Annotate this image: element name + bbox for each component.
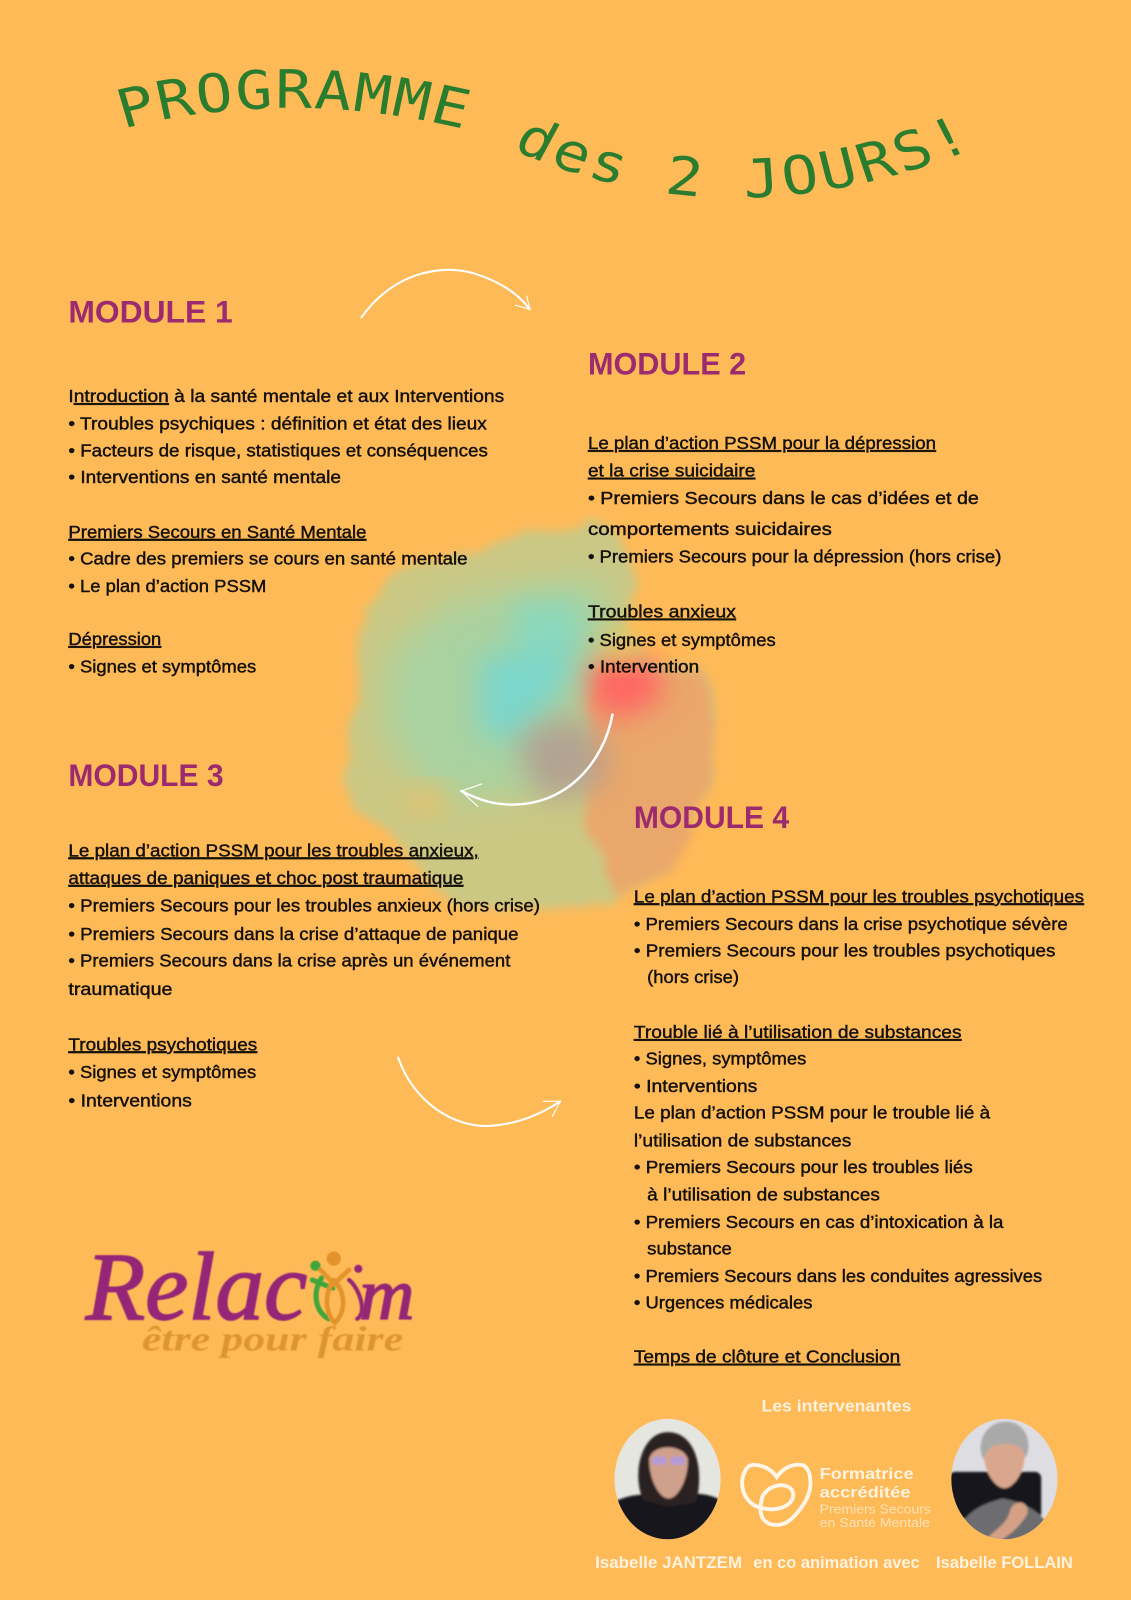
text block: substances: à l’utilisation de substances (647, 1184, 880, 1204)
text block: introduction: Introduction à la santé mentale et aux Interventions (68, 386, 505, 406)
arrow: module 2 to module 3 (461, 715, 612, 806)
text block: plan d'action troubles anxieux: attaques de paniques et choc post traumatique (68, 868, 463, 888)
icon: heart loop (742, 1465, 810, 1525)
text block: substances: • Signes, symptômes (634, 1049, 807, 1069)
logo wordmark: m (359, 1254, 414, 1335)
text block: plan d'action depression: Le plan d’action PSSM pour la dépression (588, 433, 936, 453)
text block: plan d'action troubles psychotiques (634, 886, 1084, 987)
text block: conclusion: Temps de clôture et Conclusion (634, 1347, 900, 1367)
text block: premiers secours (68, 522, 468, 596)
heading: module 4: MODULE 4 (634, 799, 789, 835)
text block: plan d'action depression (588, 433, 1001, 566)
panel: module 4 (634, 799, 1084, 1367)
text block: troubles anxieux (588, 602, 776, 677)
badge text: en Santé Mentale (820, 1515, 930, 1530)
badge text: Premiers Secours (820, 1502, 931, 1517)
text block: plan d'action troubles psychotiques: Le plan d’action PSSM pour les troubles psychotiques (634, 886, 1084, 906)
heading: module 2: MODULE 2 (588, 346, 746, 382)
text block: introduction: • Facteurs de risque, statistiques et conséquences (68, 440, 488, 460)
title: PROGRAMME (118, 69, 470, 128)
text block: depression: • Signes et symptômes (68, 657, 257, 677)
text block: substances: Trouble lié à l’utilisation de substances (634, 1022, 962, 1042)
caption: names: Isabelle JANTZEM (595, 1554, 742, 1572)
photo: Isabelle Follain (949, 1417, 1062, 1543)
text block: substances: • Urgences médicales (634, 1293, 813, 1313)
title (118, 69, 960, 198)
text block: plan d'action troubles psychotiques: • Premiers Secours dans la crise psychotique sévère (634, 914, 1068, 934)
text block: plan d'action depression: • Premiers Secours pour la dépression (hors crise) (588, 546, 1001, 566)
text block: plan d'action depression: • Premiers Secours dans le cas d’idées et de (588, 488, 979, 508)
text block: substances: Le plan d’action PSSM pour le trouble lié à (634, 1103, 991, 1123)
text block: introduction (68, 386, 505, 487)
text block: introduction: • Troubles psychiques : définition et état des lieux (68, 414, 487, 434)
badge text: Formatrice (820, 1466, 914, 1483)
text block: plan d'action depression: comportements suicidaires (588, 519, 832, 539)
text block: plan d'action troubles anxieux (68, 840, 540, 999)
text block: plan d'action troubles anxieux: Le plan d’action PSSM pour les troubles anxieux, (68, 840, 479, 860)
arrow: module 3 to module 4 (398, 1057, 560, 1126)
heading: module 3: MODULE 3 (68, 757, 224, 793)
panel: module 3 (68, 757, 540, 1110)
text block: troubles psychotiques (68, 1034, 258, 1110)
text block: plan d'action troubles anxieux: traumatique (68, 979, 173, 999)
text block: troubles psychotiques: • Interventions (68, 1090, 192, 1110)
text block: plan d'action depression: et la crise suicidaire (588, 461, 755, 481)
logo tagline: être pour faire (142, 1319, 403, 1358)
arrow: module 1 to module 2 (361, 270, 530, 317)
text block: troubles anxieux: • Intervention (588, 657, 699, 677)
text block: troubles psychotiques: • Signes et symptômes (68, 1062, 257, 1082)
text block: introduction: • Interventions en santé mentale (68, 467, 341, 487)
text block: substances: l’utilisation de substances (634, 1130, 852, 1150)
logo wordmark: Relac (85, 1234, 307, 1340)
panel: module 2 (588, 346, 1001, 677)
text block: premiers secours: • Cadre des premiers se cours en santé mentale (68, 548, 468, 568)
text block: troubles anxieux: • Signes et symptômes (588, 630, 776, 650)
text block: substances: • Interventions (634, 1076, 758, 1096)
text block: plan d'action troubles anxieux: • Premiers Secours dans la crise après un événement (68, 951, 511, 971)
text block: plan d'action troubles anxieux: • Premiers Secours pour les troubles anxieux (hors crise) (68, 896, 540, 916)
logo wordmark (85, 1234, 414, 1340)
panel: module 1 (68, 294, 505, 677)
caption: names: Isabelle FOLLAIN (936, 1554, 1073, 1572)
text block: premiers secours: Premiers Secours en Santé Mentale (68, 522, 366, 542)
text block: troubles anxieux: Troubles anxieux (588, 602, 736, 622)
caption: names (595, 1554, 1073, 1572)
text block: plan d'action troubles psychotiques: • Premiers Secours pour les troubles psychotiques (634, 940, 1056, 960)
badge: formatrice accreditee (742, 1465, 931, 1530)
logo: Relacom (85, 1234, 414, 1358)
caption: names: en co animation avec (753, 1554, 920, 1572)
text block: depression (68, 629, 257, 677)
watercolor blob (340, 521, 715, 908)
text block: premiers secours: • Le plan d’action PSSM (68, 576, 266, 596)
badge text: accréditée (820, 1484, 911, 1501)
text block: substances: • Premiers Secours dans les conduites agressives (634, 1266, 1043, 1286)
text block: plan d'action troubles anxieux: • Premiers Secours dans la crise d’attaque de panique (68, 924, 519, 944)
text block: troubles psychotiques: Troubles psychotiques (68, 1034, 258, 1054)
heading: module 1: MODULE 1 (68, 294, 233, 330)
title: des 2 JOURS! (520, 118, 960, 198)
text block: substances: substance (647, 1238, 732, 1258)
heading: les intervenantes: Les intervenantes (761, 1398, 912, 1416)
text block: plan d'action troubles psychotiques: (hors crise) (647, 967, 739, 987)
text block: substances (634, 1022, 1043, 1313)
text block: substances: • Premiers Secours en cas d’intoxication à la (634, 1212, 1004, 1232)
text block: depression: Dépression (68, 629, 161, 649)
text block: substances: • Premiers Secours pour les troubles liés (634, 1157, 973, 1177)
photo: Isabelle Jantzem (612, 1417, 725, 1541)
badge text (820, 1466, 931, 1530)
logo icon: figures (310, 1251, 362, 1323)
